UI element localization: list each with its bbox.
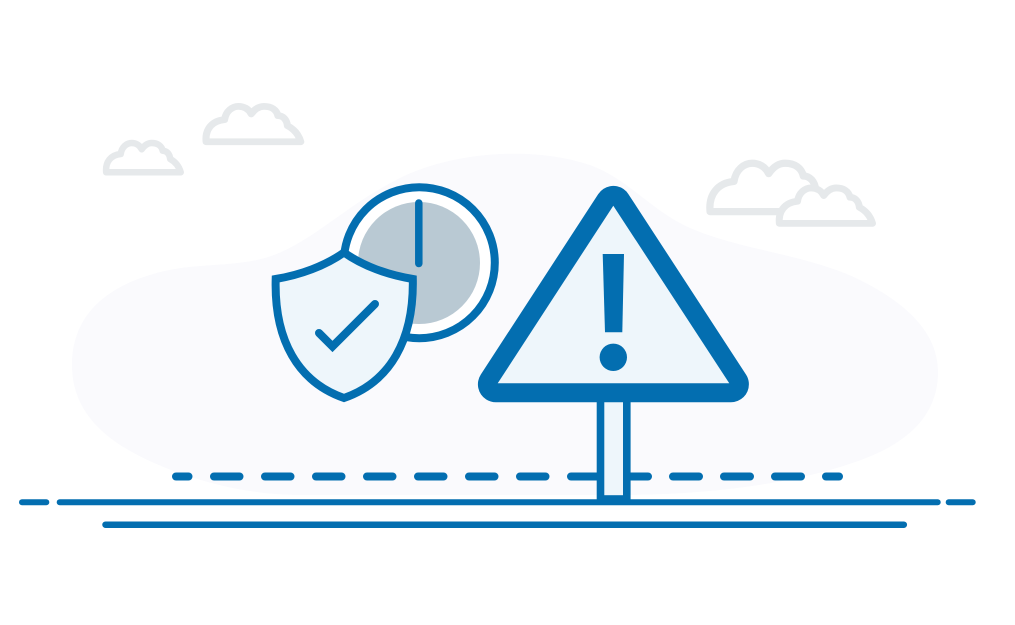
baseline segment left [22, 499, 46, 505]
cloud: upper left [206, 106, 301, 142]
sign post [600, 398, 627, 499]
dashed road line [176, 472, 839, 480]
icon: warning triangle [496, 204, 731, 384]
exclamation mark [600, 254, 627, 371]
background blob [72, 154, 938, 495]
icon: clock [344, 187, 495, 338]
check mark [319, 304, 375, 346]
lower ground line [106, 521, 904, 528]
cloud: large right [710, 163, 833, 212]
baseline segment right [949, 499, 973, 505]
icon: shield with check mark [276, 252, 413, 398]
cloud: front right [779, 188, 872, 223]
cloud: small left [106, 143, 181, 172]
baseline main [60, 499, 938, 505]
